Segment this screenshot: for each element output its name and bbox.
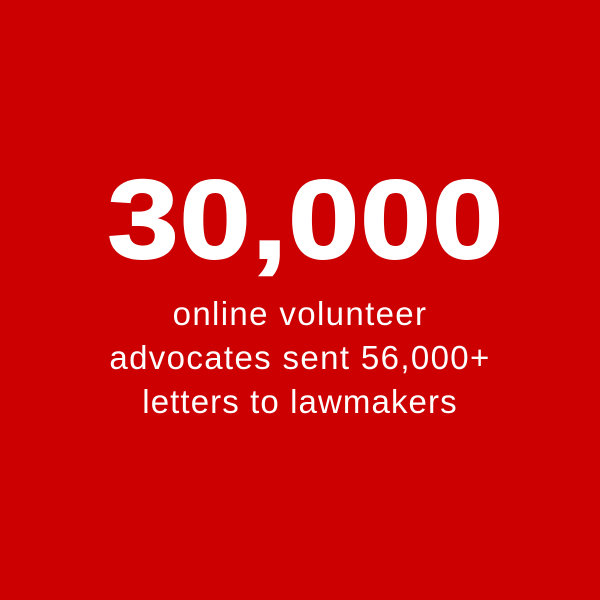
description text: letters to lawmakers — [142, 383, 458, 420]
description text — [109, 295, 491, 420]
big number: 30,000 — [108, 158, 504, 282]
description text: online volunteer — [173, 295, 427, 332]
description text: advocates sent 56,000+ — [109, 339, 491, 376]
